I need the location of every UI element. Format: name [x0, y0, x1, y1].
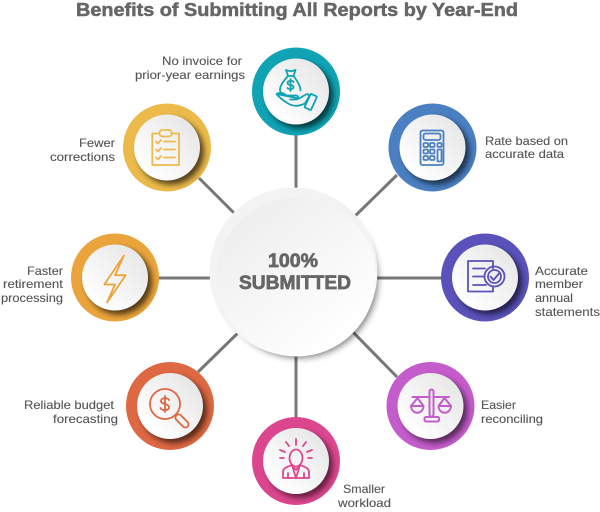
icon: checklist clipboard [152, 130, 179, 165]
node: budget forecasting [126, 362, 214, 450]
text: faster retirement processing: processing [1, 291, 63, 305]
text: accurate member annual statements: annual [535, 291, 573, 305]
center circle [210, 188, 378, 358]
text: no invoice: prior-year earnings [135, 68, 245, 82]
text: no invoice: No invoice for [162, 54, 242, 68]
text: easier reconciling: reconciling [481, 412, 543, 426]
text: faster retirement processing [1, 264, 64, 305]
node: faster retirement processing [71, 234, 159, 322]
text: faster retirement processing: Faster [27, 264, 63, 278]
node: accurate statements [441, 234, 529, 322]
text: smaller workload: workload [337, 496, 391, 510]
text: easier reconciling: Easier [481, 398, 516, 412]
center label [239, 251, 351, 294]
title: Benefits of Submitting All Reports by Year-End [76, 0, 518, 20]
icon: money bag in hand [276, 70, 317, 110]
icon: balance scales [411, 390, 451, 422]
text: fewer corrections: corrections [50, 150, 115, 164]
node: smaller workload [252, 417, 340, 505]
text: accurate member annual statements [535, 264, 600, 319]
node: no invoice [252, 48, 340, 136]
text: rate based on accurate data: accurate data [485, 147, 564, 161]
icon: calculator [420, 130, 444, 165]
text: rate based on accurate data: Rate based on [485, 134, 568, 148]
node: easier reconciling [386, 362, 474, 450]
node: fewer corrections [123, 104, 211, 192]
text: accurate member annual statements: member [535, 277, 583, 291]
node: rate based on accurate data [388, 104, 476, 192]
text: no invoice [135, 54, 245, 82]
text: reliable budget forecasting: forecasting [53, 412, 118, 426]
text: faster retirement processing: retirement [3, 277, 64, 291]
icon: person with idea rays [280, 439, 312, 478]
center label: 100% [268, 251, 318, 272]
text: smaller workload: Smaller [343, 482, 385, 496]
text: fewer corrections [50, 136, 115, 164]
icon: document with check [468, 261, 504, 292]
text: fewer corrections: Fewer [79, 136, 115, 150]
text: reliable budget forecasting [24, 398, 118, 426]
text: accurate member annual statements: statements [535, 305, 600, 319]
text: reliable budget forecasting: Reliable budget [24, 398, 115, 412]
center label: SUBMITTED [239, 273, 351, 294]
icon: magnifier with dollar [150, 389, 190, 429]
icon: lightning bolt [104, 256, 126, 302]
connector lines [158, 135, 442, 418]
text: rate based on accurate data [485, 134, 568, 161]
text: easier reconciling [481, 398, 543, 426]
text: accurate member annual statements: Accurate [535, 264, 588, 278]
text: smaller workload [337, 482, 391, 510]
